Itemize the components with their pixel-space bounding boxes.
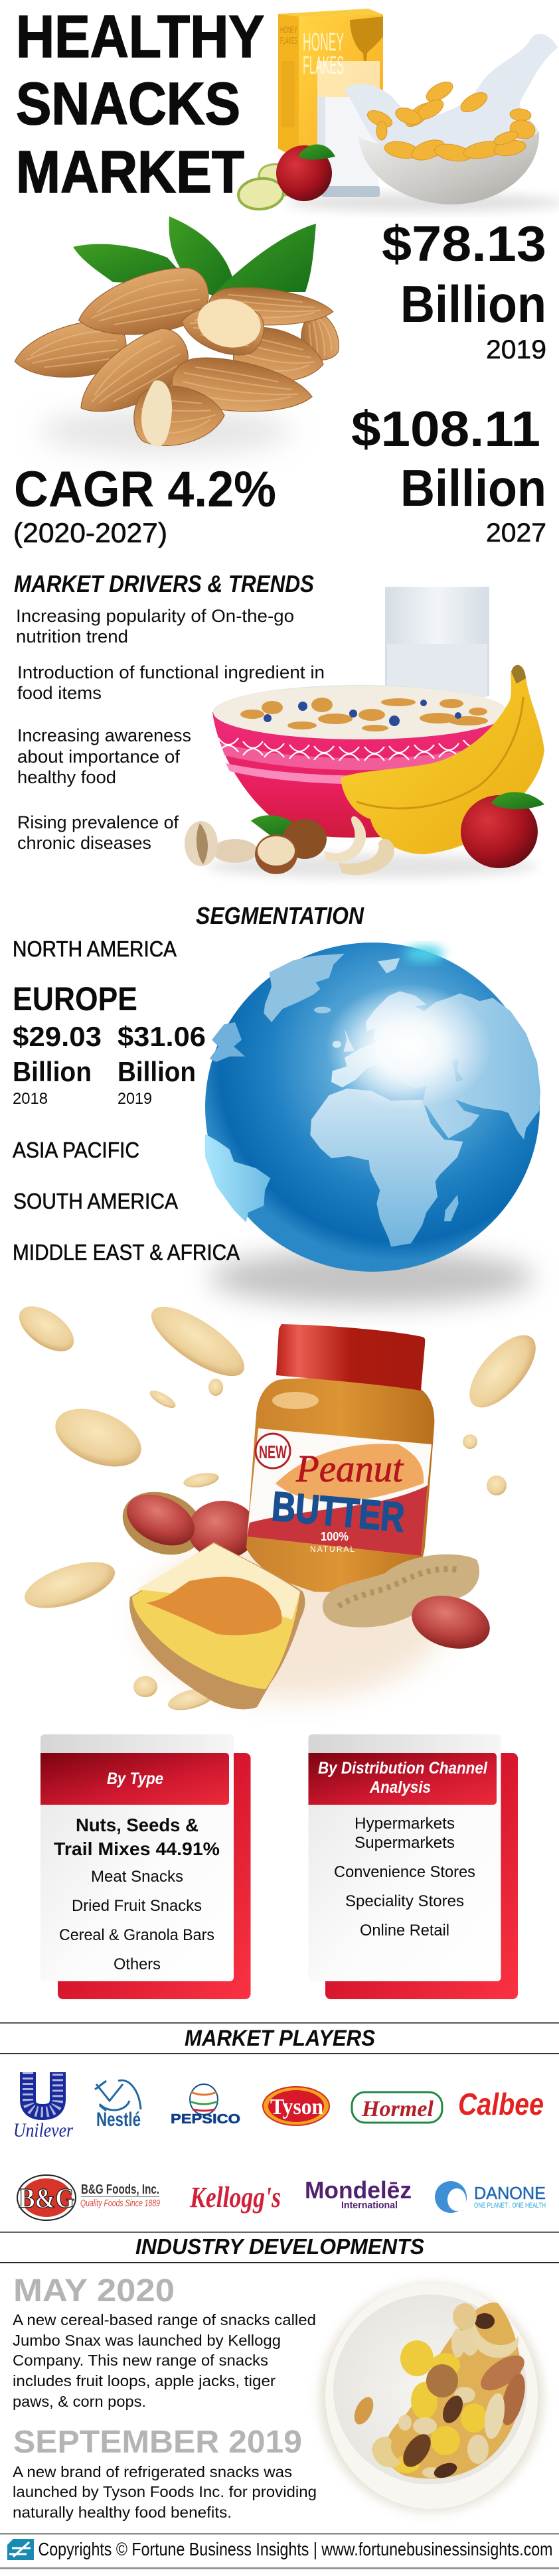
text block: market drivers list: healthy food	[17, 767, 116, 787]
illustration: almonds with leaves	[10, 216, 341, 455]
panel: by distribution channel	[308, 1734, 518, 1999]
jar label: 100%	[321, 1530, 349, 1543]
glass of milk	[317, 61, 380, 197]
cereal box: FLAKES	[303, 52, 344, 80]
logo: Mondelez: Mondelēz	[305, 2176, 412, 2204]
panel header: Analysis	[369, 1778, 431, 1797]
granola pile	[351, 2303, 530, 2481]
logo: Nestle	[95, 2080, 141, 2131]
development: May 2020: Company. This new range of snacks	[13, 2352, 268, 2369]
illustration: cereal bowl, banana, apple, nuts	[185, 587, 544, 878]
title: MARKET	[16, 139, 244, 206]
panel header	[40, 1753, 229, 1805]
text block: regions: SOUTH AMERICA	[13, 1189, 178, 1213]
milk splash	[344, 34, 558, 153]
peanut shell	[323, 1554, 496, 1657]
panel header	[308, 1753, 497, 1805]
illustration: plate of granola	[320, 2283, 543, 2512]
development: September 2019: naturally healthy food benefits.	[13, 2504, 232, 2521]
stat: 2027 market size: $108.11	[351, 401, 540, 457]
logo: B&G Foods: B&G Foods, Inc.	[81, 2182, 159, 2197]
logo: Hormel	[352, 2092, 442, 2123]
type list: Trail Mixes 44.91%	[54, 1839, 220, 1859]
development: September 2019: SEPTEMBER 2019	[13, 2425, 302, 2460]
title	[16, 4, 264, 206]
text block: market drivers list: about importance of	[17, 747, 181, 767]
text block: regions: MIDDLE EAST & AFRICA	[13, 1240, 240, 1264]
region highlight: Europe: 2019	[118, 1090, 152, 1108]
cereal bowl	[359, 131, 539, 204]
distribution list: Supermarkets	[355, 1834, 455, 1852]
text block: regions: ASIA PACIFIC	[13, 1138, 139, 1162]
cereal in bowl	[240, 698, 488, 731]
logo: PepsiCo	[171, 2084, 240, 2127]
logo: Danone: DANONE	[474, 2183, 546, 2203]
distribution list: Online Retail	[360, 1922, 449, 1939]
development: September 2019	[13, 2425, 317, 2521]
logo: PepsiCo: PEPSICO	[171, 2112, 240, 2127]
jar label: BUTTER	[270, 1483, 406, 1541]
text block: market drivers list: nutrition trend	[16, 627, 128, 646]
region highlight: Europe: Billion	[13, 1056, 92, 1087]
cereal box: HONEY	[303, 29, 344, 56]
logo: Hormel: Hormel	[361, 2097, 434, 2121]
type list: Others	[114, 1955, 161, 1973]
development: May 2020: Jumbo Snax was launched by Kellogg	[13, 2332, 281, 2349]
logo: Unilever	[13, 2072, 73, 2141]
logo: Mondelez: International	[341, 2200, 398, 2211]
development: September 2019: A new brand of refrigerated snacks was	[13, 2463, 292, 2480]
distribution list: Speciality Stores	[345, 1892, 464, 1910]
region highlight: Europe: $29.03	[13, 1021, 102, 1052]
text block: market drivers list: Introduction of functional ingredient in	[17, 662, 325, 682]
title: HEALTHY	[16, 4, 264, 70]
jar label	[247, 1428, 432, 1556]
jar	[246, 1324, 434, 1592]
type list	[54, 1815, 220, 1973]
jar label: NATURAL	[310, 1545, 355, 1554]
development: September 2019: launched by Tyson Foods Inc. for providing	[13, 2483, 317, 2500]
jar label: Peanut	[295, 1447, 404, 1490]
text block: market drivers list: Rising prevalence of	[17, 812, 179, 832]
illustration: cereal box, milk, apple and bowl	[237, 9, 559, 212]
distribution list: Hypermarkets	[355, 1815, 455, 1833]
logo: Tyson	[263, 2087, 329, 2125]
text block: market drivers list: chronic diseases	[17, 833, 151, 853]
toast	[129, 1542, 305, 1709]
heading: segmentation: SEGMENTATION	[196, 902, 364, 929]
logo: Unilever: Unilever	[13, 2119, 73, 2141]
text block: regions: NORTH AMERICA	[13, 937, 177, 961]
red peanuts in shell	[114, 1481, 257, 1565]
logo: Tyson: Tyson	[270, 2095, 323, 2119]
cereal flakes	[365, 78, 536, 164]
stat: 2019 market size	[382, 216, 546, 364]
stat: 2019 market size: $78.13	[382, 216, 546, 271]
continents	[205, 954, 540, 1247]
text block: market drivers list: Increasing awareness	[17, 725, 191, 745]
cereal box	[278, 9, 383, 159]
logo: Calbee: Calbee	[458, 2087, 544, 2121]
illustration: globe	[205, 943, 540, 1306]
glass	[385, 587, 489, 697]
text block: market drivers list	[16, 606, 325, 853]
logo: Kellogg's: Kellogg's	[189, 2181, 281, 2214]
bananas	[341, 665, 544, 854]
heading: industry developments: INDUSTRY DEVELOPMENTS	[135, 2234, 424, 2259]
nuts	[185, 810, 394, 875]
distribution list	[334, 1815, 475, 1939]
logo: Danone	[435, 2181, 546, 2213]
type list: Cereal & Granola Bars	[59, 1926, 214, 1944]
text block: regions	[13, 937, 240, 1264]
type list: Nuts, Seeds &	[76, 1815, 199, 1835]
development: May 2020: A new cereal-based range of snacks called	[13, 2311, 316, 2328]
text block: market drivers list: food items	[17, 683, 102, 703]
panel: by type	[40, 1734, 251, 1999]
heading: market drivers: MARKET DRIVERS & TRENDS	[14, 570, 314, 597]
text block: market drivers list: Increasing popularity of On-the-go	[16, 606, 294, 626]
distribution list: Convenience Stores	[334, 1863, 475, 1881]
stat: 2027 market size	[351, 401, 546, 548]
logo: B&G Foods: Quality Foods Since 1889	[80, 2198, 160, 2209]
loose peanuts	[11, 1294, 547, 1714]
logos: market players	[13, 2072, 546, 2220]
stat: CAGR: (2020-2027)	[13, 517, 167, 548]
stat: CAGR	[13, 461, 276, 548]
development: May 2020: paws, & corn pops.	[13, 2393, 146, 2410]
logo: B&G Foods: B&G	[19, 2184, 74, 2214]
jar label: NEW	[259, 1442, 287, 1462]
region highlight: Europe	[13, 980, 206, 1108]
type list: Dried Fruit Snacks	[72, 1897, 202, 1915]
region highlight: Europe: $31.06	[118, 1021, 206, 1052]
almonds	[10, 261, 341, 447]
cereal box: HONEY	[280, 25, 297, 36]
panel header: By Distribution Channel	[318, 1759, 488, 1778]
stat: 2027 market size: 2027	[486, 518, 546, 548]
stat: 2019 market size: Billion	[400, 275, 546, 333]
type list: Meat Snacks	[91, 1868, 183, 1886]
region highlight: Europe: Billion	[118, 1056, 196, 1087]
stat: 2027 market size: Billion	[400, 459, 546, 517]
pink bowl	[212, 685, 508, 838]
development: May 2020	[13, 2273, 316, 2410]
region highlight: Europe: 2018	[13, 1090, 48, 1108]
apple slices	[237, 159, 305, 211]
stat: CAGR: CAGR 4.2%	[14, 461, 276, 518]
panel header: By Type	[107, 1770, 163, 1788]
logo: B&G Foods	[17, 2175, 160, 2220]
apple	[461, 792, 544, 868]
logo: Nestle: Nestlé	[96, 2109, 141, 2131]
title: SNACKS	[16, 71, 240, 137]
illustration: peanut butter jar and peanuts	[11, 1294, 547, 1714]
development: May 2020: MAY 2020	[13, 2273, 175, 2309]
icon: Fortune Business Insights logo	[7, 2539, 34, 2560]
leaves	[73, 216, 316, 299]
cereal box: FLAKES	[280, 35, 297, 46]
region highlight: Europe: EUROPE	[13, 980, 137, 1018]
development: May 2020: includes fruit loops, apple jacks, tiger	[13, 2372, 276, 2389]
stat: 2019 market size: 2019	[486, 335, 546, 364]
apple	[276, 145, 335, 201]
heading: market players: MARKET PLAYERS	[185, 2026, 375, 2051]
